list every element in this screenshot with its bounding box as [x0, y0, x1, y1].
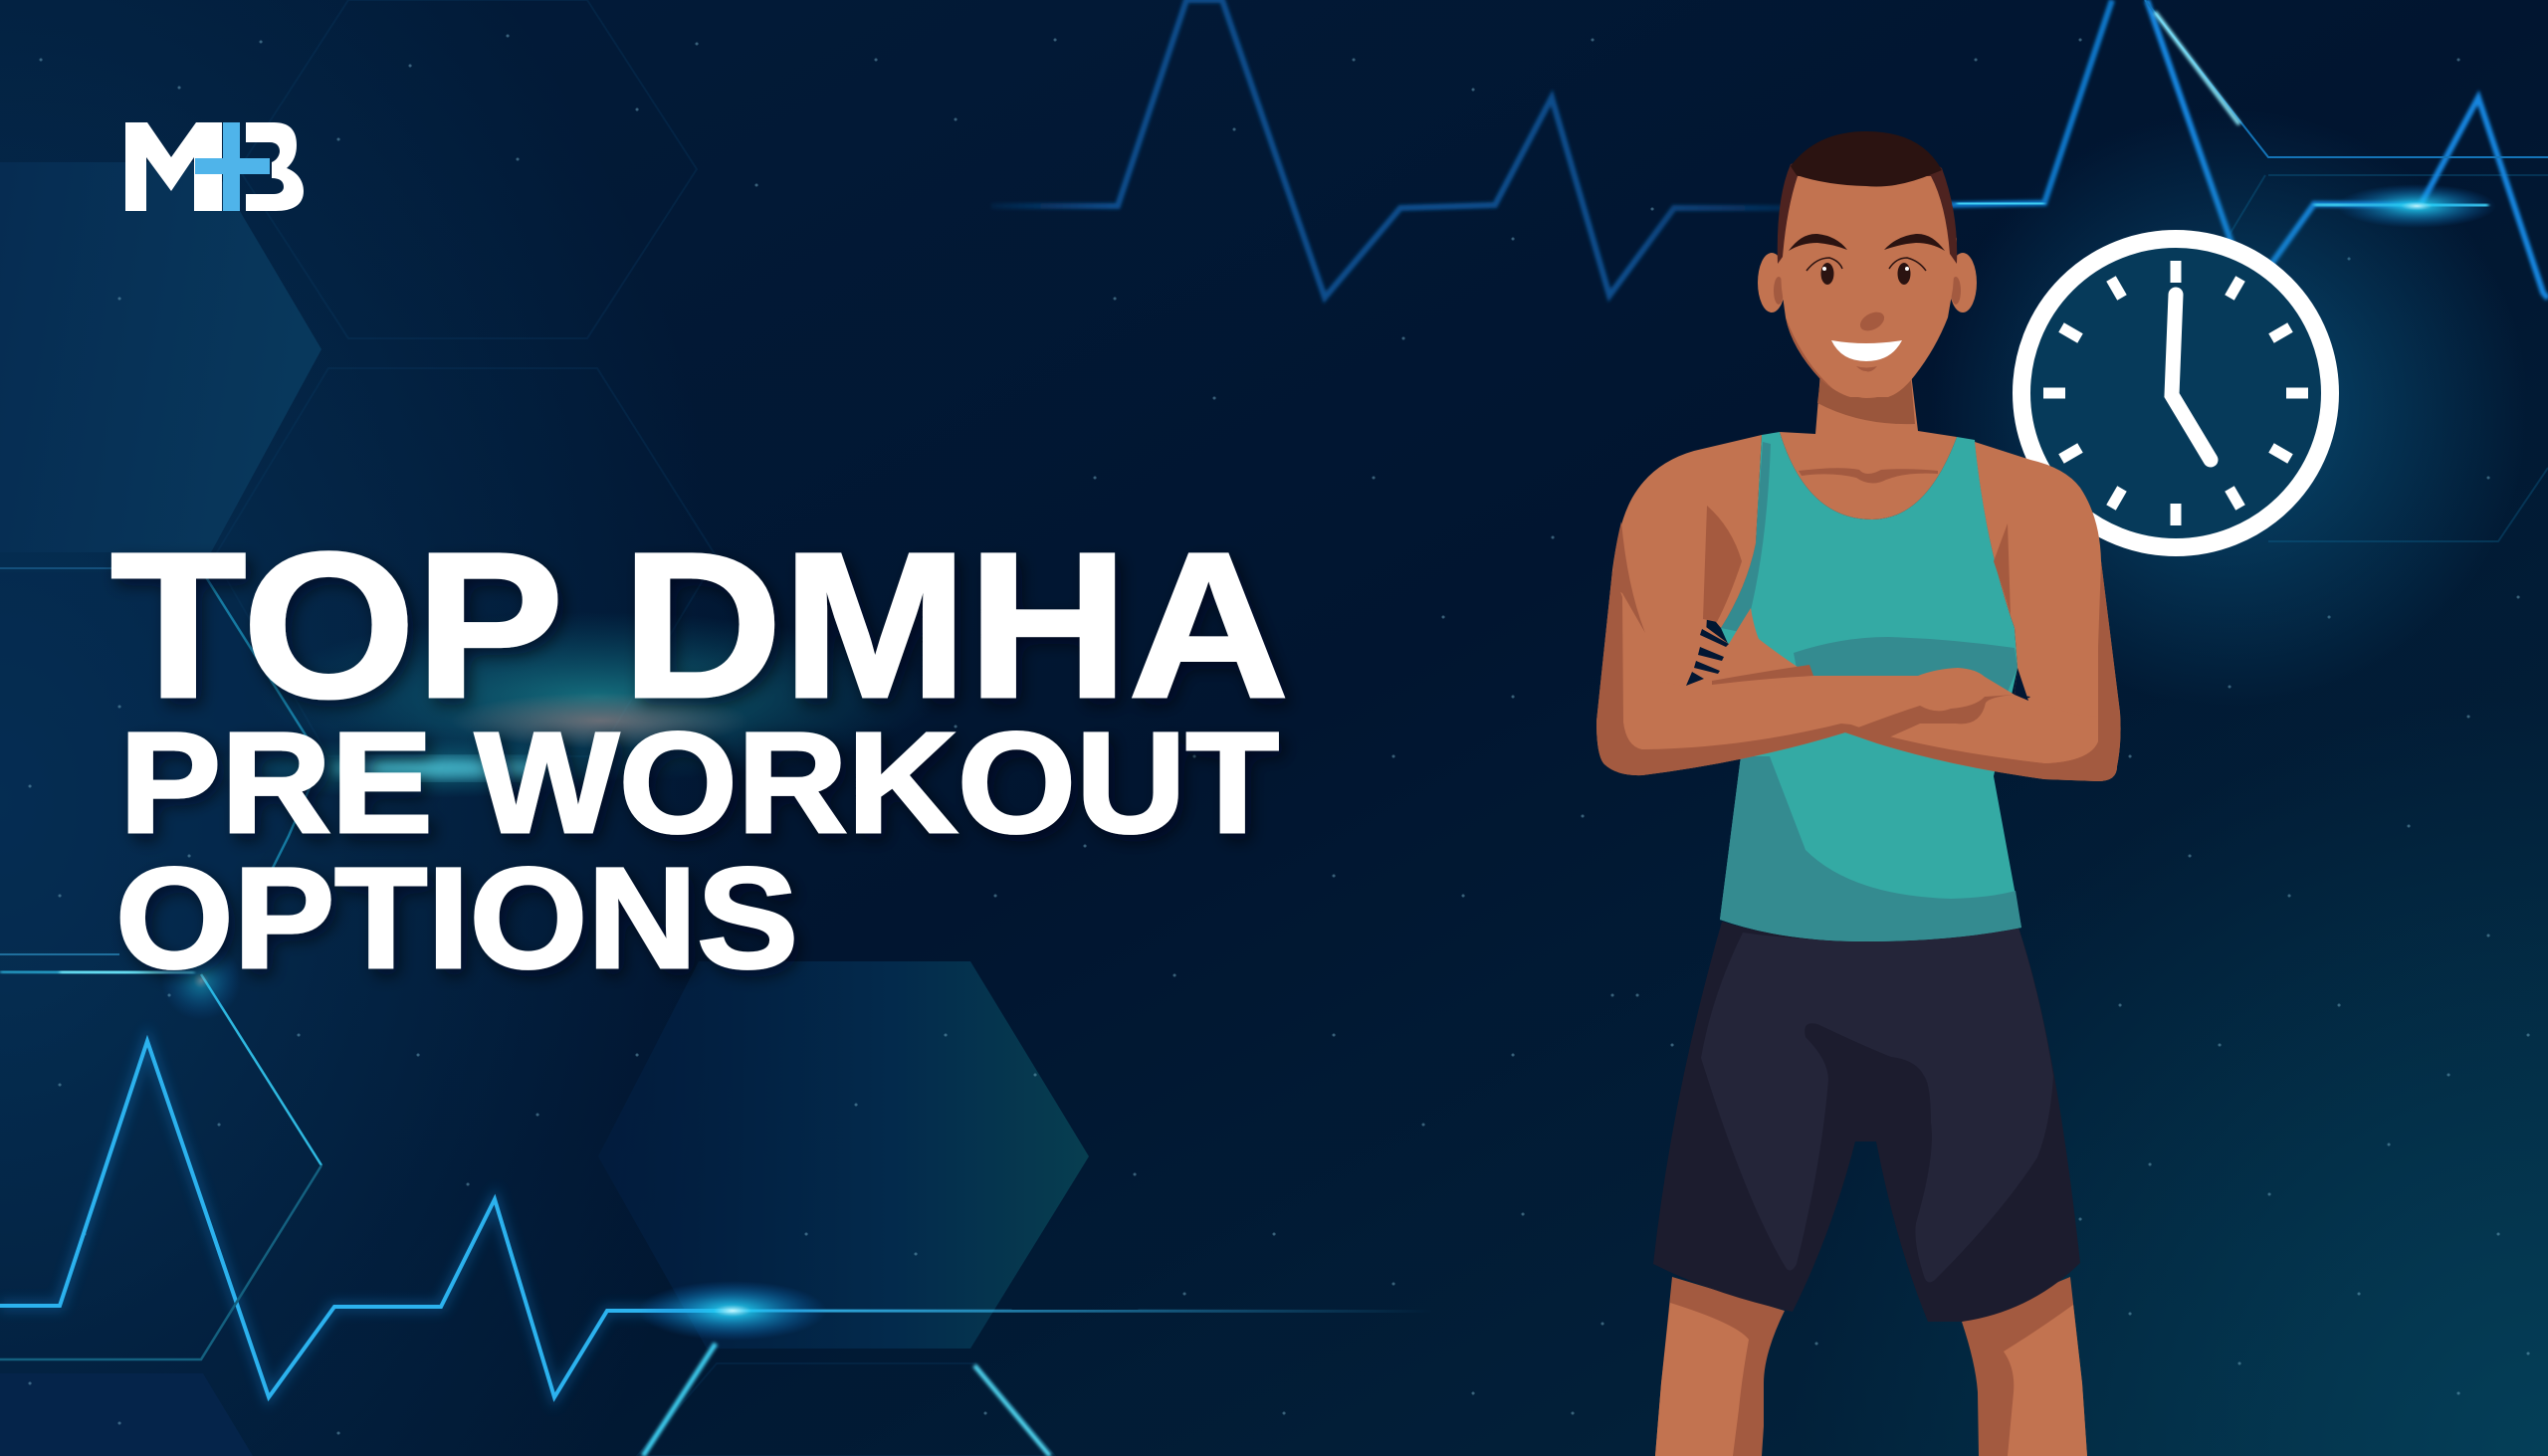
icon: clock: [2021, 239, 2330, 547]
eyebrows: [1789, 234, 1945, 251]
chest shadows: [1703, 506, 2011, 622]
title line 2: PRE WORKOUT: [119, 703, 1279, 863]
logo: [125, 122, 304, 211]
title line 1: TOP DMHA: [110, 511, 1289, 741]
person: [1596, 131, 2121, 1456]
face: [1779, 171, 1957, 397]
hair: [1778, 131, 1957, 264]
glow behind title: [199, 612, 936, 798]
eyes: [1806, 258, 1926, 285]
hand shadow: [1845, 695, 2015, 742]
legs: [1655, 1277, 2087, 1456]
clock glow: [1931, 109, 2528, 707]
face shadow: [1786, 317, 1833, 389]
neck shadow: [1817, 379, 1915, 424]
neck: [1780, 373, 1957, 520]
ECG line: bottom left: [0, 1041, 1433, 1397]
title: [110, 511, 1289, 998]
ECG line: top: [991, 0, 2112, 298]
shorts: [1653, 922, 2080, 1322]
smile: [1831, 340, 1902, 361]
hexagon outline lines: bottom left: [0, 568, 1050, 1456]
ECG line: top right: [2145, 0, 2548, 299]
forearm: [1623, 668, 2098, 763]
finger gaps: [1686, 629, 1729, 686]
tank top: [1720, 432, 2021, 941]
ears: [1758, 253, 1977, 312]
collarbone: [1799, 468, 1938, 484]
lower lip: [1856, 366, 1877, 371]
forearm shadow: [1712, 665, 1813, 685]
hand left: [1694, 608, 1809, 687]
clock hands: [2172, 295, 2211, 460]
nose: [1857, 309, 1887, 334]
arms and shoulders: [1596, 435, 2121, 781]
gap between arm and tank: [2015, 668, 2028, 701]
title line 3: OPTIONS: [115, 838, 798, 998]
